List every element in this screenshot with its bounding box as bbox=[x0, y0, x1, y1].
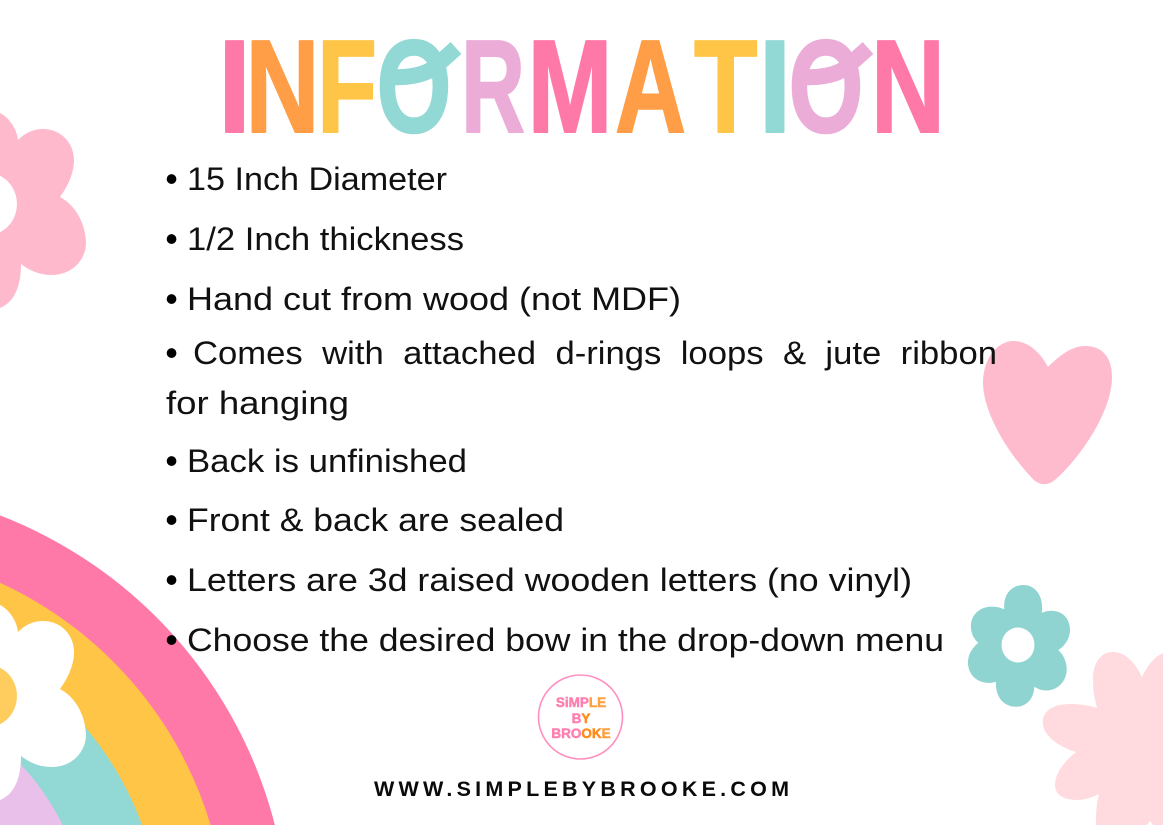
icon: white flower on rainbow bbox=[0, 605, 86, 800]
website url: WWW.SIMPLEBYBROOKE.COM bbox=[374, 777, 789, 801]
item: thickness: 1/2 Inch thickness bbox=[187, 221, 464, 257]
item: hanging: Comes with attached d-rings loops & jute ribbon bbox=[193, 335, 997, 371]
title letter R: R bbox=[461, 13, 525, 160]
icon: pink flower left bbox=[0, 113, 86, 308]
item: material: Hand cut from wood (not MDF) bbox=[187, 281, 681, 317]
item: thickness: • bbox=[165, 218, 178, 259]
item: hanging: for hanging bbox=[166, 385, 349, 421]
item: letters: • bbox=[165, 559, 178, 600]
item: diameter: • bbox=[165, 158, 178, 199]
title letter O: O bbox=[788, 13, 864, 160]
rainbow bbox=[0, 515, 275, 825]
title letter O: O bbox=[376, 13, 452, 160]
item: bow: Choose the desired bow in the drop-down menu bbox=[187, 622, 944, 658]
logo badge: BROOKE bbox=[551, 726, 611, 741]
title letter M: M bbox=[528, 13, 612, 160]
item: hanging bbox=[165, 332, 997, 421]
item: bow: • bbox=[165, 619, 178, 660]
title letter I: I bbox=[218, 13, 251, 160]
item: back: Back is unfinished bbox=[187, 443, 467, 479]
logo badge: SiMPLE bbox=[556, 695, 606, 710]
title bbox=[218, 13, 945, 160]
item: letters: Letters are 3d raised wooden letters (no vinyl) bbox=[187, 562, 912, 598]
title letter A: A bbox=[615, 13, 686, 160]
item: sealed: Front & back are sealed bbox=[187, 502, 564, 538]
logo badge: BY bbox=[572, 711, 590, 726]
title letter T: T bbox=[694, 13, 758, 160]
title letter F: F bbox=[317, 13, 377, 160]
logo badge bbox=[538, 675, 622, 759]
icon: pink heart bbox=[983, 341, 1112, 484]
item: diameter: 15 Inch Diameter bbox=[187, 161, 447, 197]
title letter N: N bbox=[246, 13, 320, 160]
item: sealed: • bbox=[165, 499, 178, 540]
icon: teal flower bbox=[968, 585, 1070, 707]
item: material: • bbox=[165, 278, 178, 319]
item: back: • bbox=[165, 440, 178, 481]
bullet list bbox=[165, 158, 997, 660]
title letter I: I bbox=[758, 13, 792, 160]
title letter N: N bbox=[871, 13, 945, 160]
item: hanging: • bbox=[165, 332, 178, 373]
icon: pale pink flower bbox=[1043, 652, 1163, 825]
